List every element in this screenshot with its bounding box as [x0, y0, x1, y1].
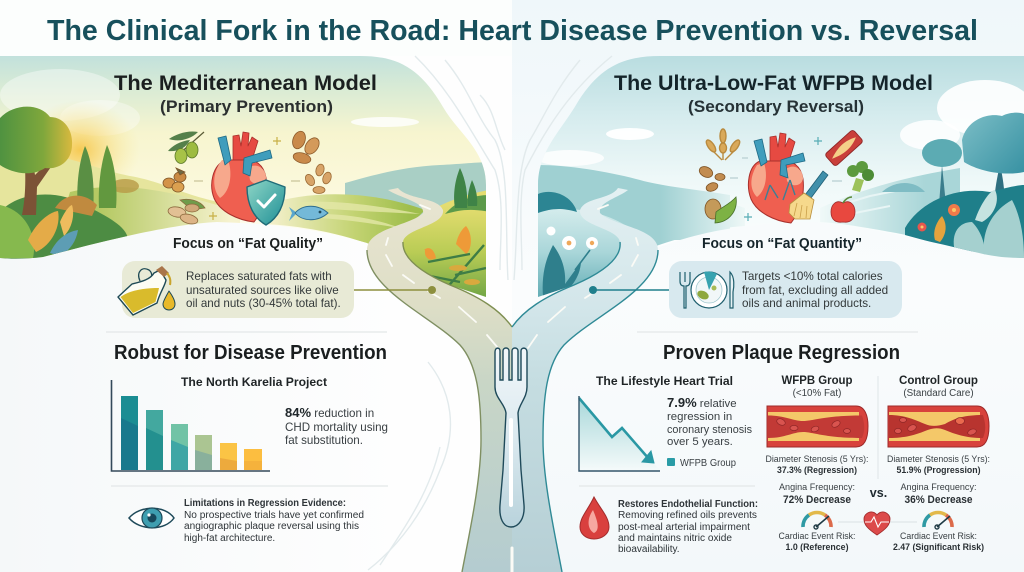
label: vs.: vs. [870, 486, 887, 500]
column: WFPB group: (<10% Fat) [793, 388, 841, 399]
text: limitations: angiographic plaque reversal using this [184, 521, 359, 532]
callout: fat quality: oil and nuts (30-45% total fat). [186, 297, 341, 310]
column: WFPB group: 72% Decrease [783, 494, 851, 506]
scene: WFPB landscape [535, 56, 1024, 301]
small sparkles right [730, 137, 842, 221]
icon: seeds [304, 163, 333, 194]
icon: heart with brush [748, 133, 828, 223]
column: WFPB group [766, 373, 868, 552]
heading: Mediterranean model: (Primary Prevention) [160, 98, 333, 116]
icon: beans [698, 165, 725, 193]
scene: Mediterranean landscape [0, 56, 490, 301]
stat: 7.9% regression: regression in [667, 411, 732, 423]
icon: artery narrowed [888, 406, 989, 447]
icon: hazelnuts [163, 168, 186, 192]
column: control group: 2.47 (Significant Risk) [893, 541, 984, 552]
stat: 7.9% regression [667, 395, 752, 448]
callout: fat quantity: Targets <10% total calories [742, 270, 883, 283]
text: limitations: high-fat architecture. [184, 533, 275, 544]
icon: wheat [705, 129, 741, 160]
title: The Clinical Fork in the Road: Heart Disease Prevention vs. Reversal [47, 15, 978, 47]
column: control group [887, 373, 990, 552]
icon: artery segment [825, 129, 863, 167]
column: WFPB group: 1.0 (Reference) [786, 541, 848, 552]
heading: WFPB model [614, 72, 933, 116]
column: WFPB group: Cardiac Event Risk: [778, 531, 856, 542]
callout: fat quantity: oils and animal products. [742, 297, 871, 310]
road: left branch [367, 188, 512, 572]
icon: olive oil bottle [118, 266, 175, 315]
road outlines [367, 242, 658, 572]
icon: potato and pod [705, 197, 736, 223]
small sparkles left [194, 137, 300, 220]
subheading: Lifestyle Heart Trial: The Lifestyle Heart Trial [596, 374, 733, 388]
column divider [877, 376, 879, 479]
text: endothelial function: bioavailability. [618, 544, 680, 555]
stat: 7.9% regression: coronary stenosis [667, 424, 752, 436]
icon: gauge high [924, 512, 952, 529]
decorative dividers [106, 332, 918, 486]
icon: blood drop [580, 497, 609, 539]
stat: 84% reduction: 84% reduction in [285, 405, 374, 420]
text: limitations: Limitations in Regression Evidence: [184, 498, 346, 509]
column: control group: (Standard Care) [903, 388, 974, 399]
callout: fat quality [118, 261, 354, 318]
bar chart: North Karelia [112, 380, 270, 471]
subheading: Fat Quality: Focus on “Fat Quality” [173, 236, 323, 252]
heading: proven plaque regression: Proven Plaque Regression [663, 342, 900, 364]
column: control group: Control Group [899, 373, 978, 387]
icon: gauge low [803, 512, 831, 529]
heading: Mediterranean model: The Mediterranean Model [114, 72, 377, 95]
column: WFPB group: Angina Frequency: [779, 482, 855, 493]
text: endothelial function: Removing refined oils prevents [618, 510, 757, 521]
text: endothelial function: post-meal arterial impairment [618, 522, 750, 533]
column: control group: Diameter Stenosis (5 Yrs): [887, 454, 990, 464]
callout: fat quality: unsaturated sources like olive [186, 284, 339, 297]
callout: fat quantity: from fat, excluding all added [742, 284, 888, 297]
stat: 84% reduction: fat substitution. [285, 434, 363, 447]
stat: 84% reduction: CHD mortality using [285, 421, 388, 434]
connector: fat quantity to road [589, 286, 669, 294]
icon: plate and cutlery [680, 272, 734, 308]
icon: fish [289, 206, 328, 221]
icon: olive branch [168, 131, 204, 164]
icon: broccoli [847, 161, 874, 192]
icon: heart with shield [212, 132, 285, 225]
icon: eye [129, 508, 174, 528]
column: control group: Cardiac Event Risk: [900, 531, 977, 542]
column: WFPB group: WFPB Group [782, 373, 852, 387]
icon: artery open [767, 406, 868, 447]
text: limitations: No prospective trials have yet confirmed [184, 510, 364, 521]
column: control group: Angina Frequency: [900, 482, 976, 493]
line chart: regression [579, 396, 660, 471]
stat: 7.9% regression: over 5 years. [667, 436, 733, 448]
stat: 7.9% regression: 7.9% relative [667, 395, 737, 410]
icon: heart with pulse [838, 512, 917, 535]
column: control group: 51.9% (Progression) [896, 464, 980, 475]
text: endothelial function [618, 499, 758, 555]
road lane dashes [386, 205, 638, 572]
callout: fat quantity [669, 261, 902, 318]
connector: fat quality to road [354, 286, 436, 294]
column: WFPB group: 37.3% (Regression) [777, 464, 857, 475]
heading: robust for disease prevention: Robust for Disease Prevention [114, 342, 387, 364]
road: right branch [512, 188, 658, 572]
legend: WFPB group: WFPB Group [680, 458, 737, 469]
heading: WFPB model: The Ultra-Low-Fat WFPB Model [614, 72, 933, 95]
callout: fat quality: Replaces saturated fats with [186, 270, 332, 283]
column: control group: 36% Decrease [904, 494, 972, 506]
text: endothelial function: Restores Endothelial Function: [618, 499, 758, 510]
text: endothelial function: and maintains nitric oxide [618, 533, 732, 544]
column: WFPB group: Diameter Stenosis (5 Yrs): [766, 454, 868, 464]
subheading: Fat Quantity: Focus on “Fat Quantity” [702, 236, 862, 252]
stat: 84% reduction [285, 405, 388, 447]
heading: Mediterranean model [114, 72, 377, 116]
subheading: North Karelia Project: The North Karelia Project [181, 375, 327, 389]
icon: almonds [290, 129, 322, 165]
icon: nuts and leaf [167, 199, 205, 226]
icon: fork [495, 348, 527, 527]
decorative wisps [368, 56, 612, 570]
text: limitations [184, 498, 364, 544]
icon: apple [831, 197, 855, 222]
heading: WFPB model: (Secondary Reversal) [688, 98, 864, 116]
